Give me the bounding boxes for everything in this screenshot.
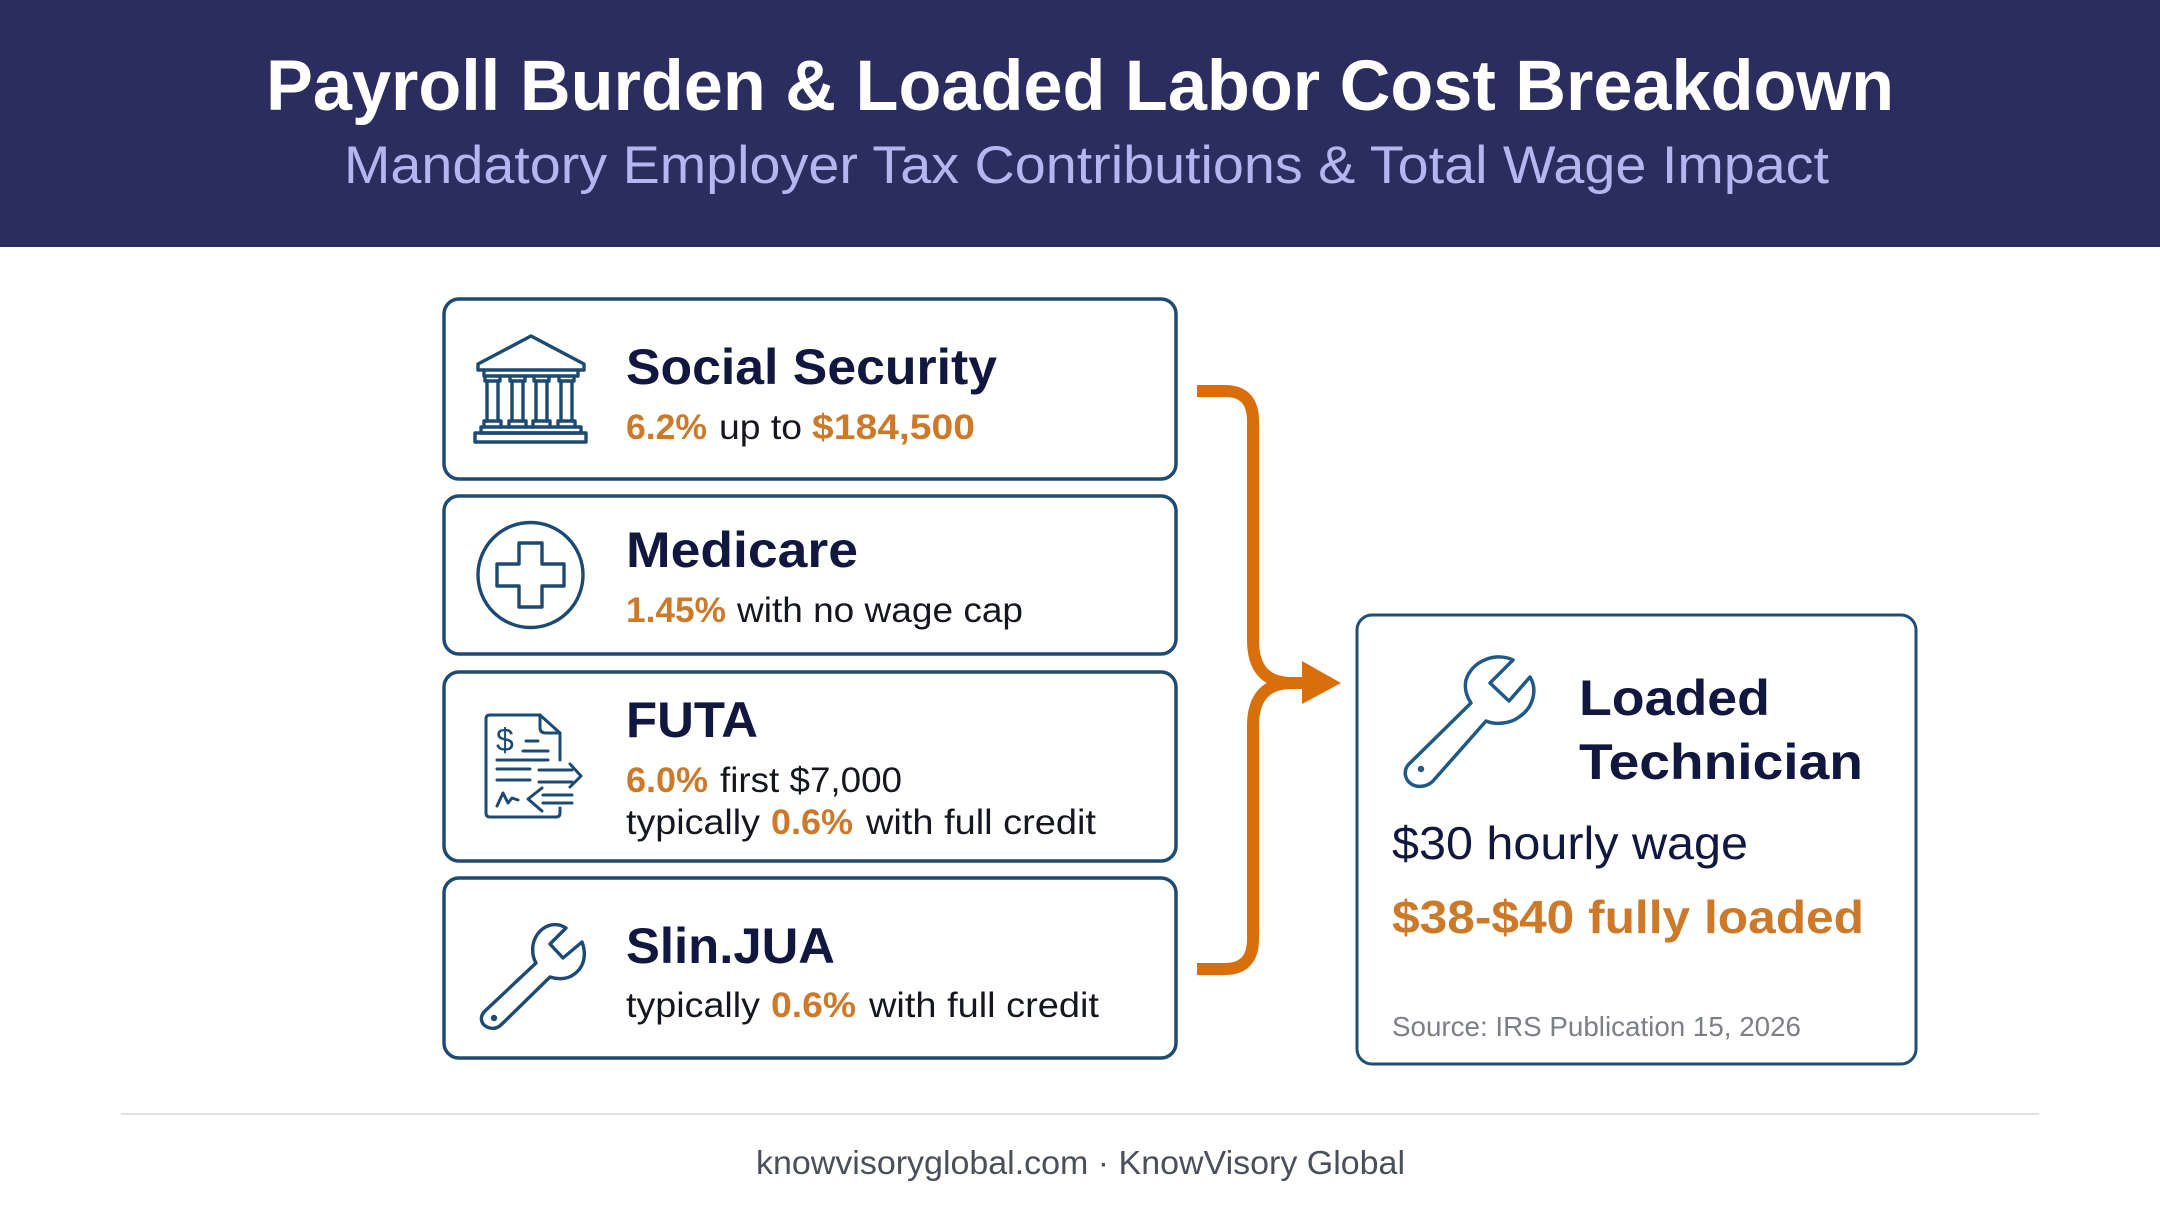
heading: Social Security (626, 339, 997, 395)
rate text: with no wage cap (736, 591, 1023, 630)
icon: wrench (481, 925, 584, 1028)
rate text (626, 408, 975, 447)
icon: medical cross in circle (478, 522, 583, 628)
fully loaded cost: $38-$40 fully loaded (1392, 891, 1864, 943)
heading: Medicare (626, 522, 858, 578)
subtitle: Mandatory Employer Tax Contributions & Total Wage Impact (344, 136, 1829, 195)
rate text line 2: with full credit (865, 803, 1096, 842)
rate text: up to (719, 408, 802, 447)
rate text line 2: typically (626, 803, 761, 842)
rate text: $184,500 (812, 408, 975, 447)
panel: Medicare (444, 496, 1176, 654)
heading: FUTA (626, 692, 758, 748)
panel: Slin.JUA (444, 878, 1176, 1058)
panel: FUTA (444, 672, 1176, 861)
rate text line 1: first $7,000 (720, 761, 902, 800)
rate text: with full credit (868, 986, 1099, 1025)
rate text: 6.2% (626, 408, 707, 447)
footer: knowvisoryglobal.com · KnowVisory Global (756, 1144, 1405, 1181)
rate text line 2: 0.6% (771, 803, 853, 842)
hourly wage: $30 hourly wage (1392, 817, 1748, 869)
source: Source: IRS Publication 15, 2026 (1392, 1011, 1801, 1042)
rate text line 2 (626, 803, 1096, 842)
rate text (626, 591, 1023, 630)
title: Payroll Burden & Loaded Labor Cost Breakdown (266, 47, 1894, 126)
heading: Loaded (1579, 670, 1770, 726)
icon: tax document with arrows (486, 715, 581, 817)
header banner (0, 0, 2160, 247)
heading: Slin.JUA (626, 918, 835, 974)
rate text: 1.45% (626, 591, 726, 630)
icon: bank building (475, 336, 586, 442)
heading (1579, 670, 1863, 790)
icon: tax document with arrows: $ (496, 722, 514, 758)
panel: Loaded Technician (1357, 615, 1916, 1064)
rate text: typically (626, 986, 761, 1025)
rate text: 0.6% (771, 986, 856, 1025)
arrow: bracket joining cards into result (1197, 391, 1341, 969)
panel: Social Security (444, 299, 1176, 479)
rate text (626, 986, 1099, 1025)
heading: Technician (1579, 734, 1863, 790)
rate text line 1: 6.0% (626, 761, 708, 800)
rate text line 1 (626, 761, 902, 800)
icon: wrench (1405, 657, 1534, 786)
